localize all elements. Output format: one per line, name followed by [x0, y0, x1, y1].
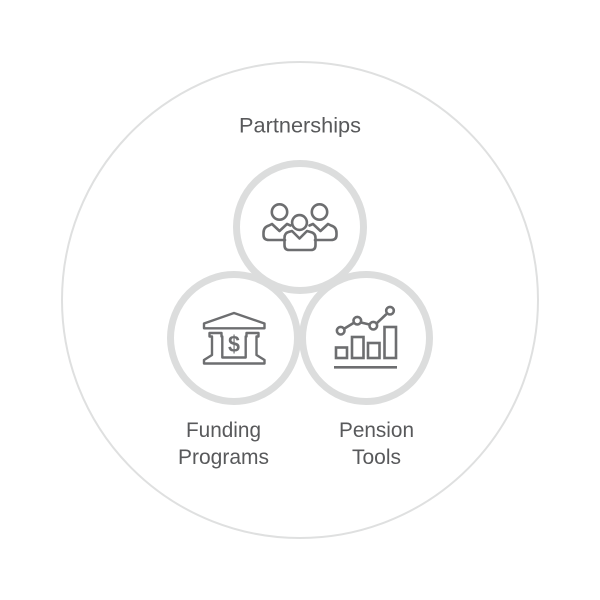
heading: Partnerships: Partnerships [239, 114, 361, 138]
icon detail: dollar sign: $ [228, 331, 240, 357]
icon: people [264, 204, 336, 250]
icon: bank [204, 313, 264, 364]
circle: funding programs [170, 274, 298, 402]
icon: chart [334, 307, 397, 367]
label: Pension Tools [339, 419, 414, 469]
outer circle [62, 62, 538, 538]
circle: partnerships [236, 164, 364, 290]
circle: pension tools [302, 274, 430, 402]
label: Pension Tools: Tools [352, 446, 401, 469]
label: Funding Programs: Funding [186, 419, 261, 442]
label: Pension Tools: Pension [339, 419, 414, 442]
label: Funding Programs: Programs [178, 446, 269, 469]
label: Funding Programs [178, 419, 269, 469]
